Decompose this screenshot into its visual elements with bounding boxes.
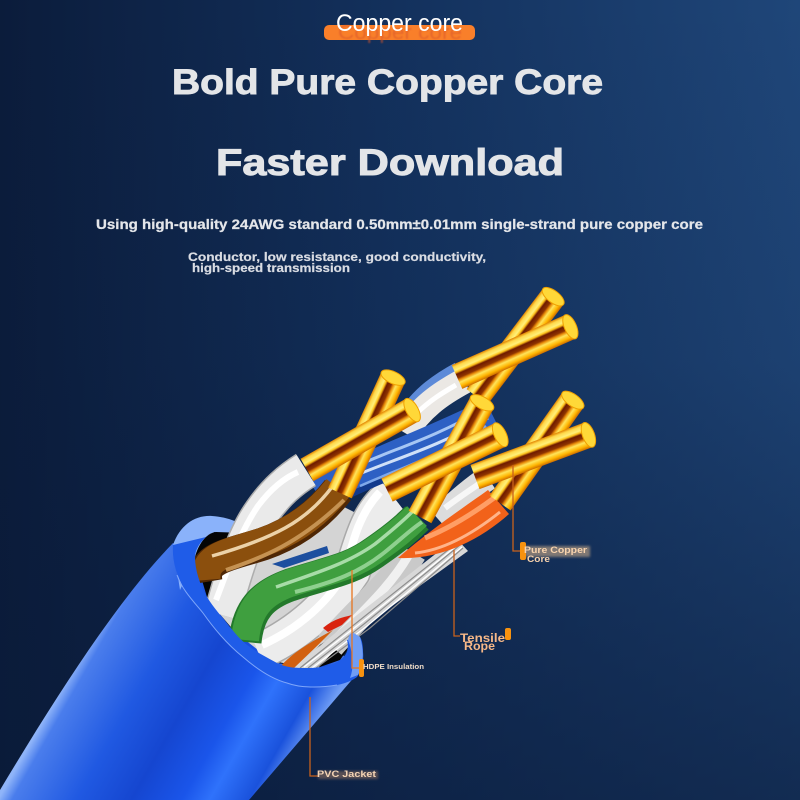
copper conductors: top and right pairs: [452, 284, 599, 511]
white wire: rear: [405, 376, 488, 519]
green wire: [245, 512, 422, 642]
callout: Tensile Rope: [454, 550, 511, 653]
cable illustration: [0, 284, 599, 800]
callout: HDPE Insulation: [352, 570, 424, 677]
copper conductors: center pair: [381, 391, 511, 523]
white wire mass: [208, 505, 410, 666]
callout: PVC Jacket: PVC Jacket: [317, 769, 377, 780]
callout: Tensile Rope: Tensile: [460, 633, 505, 645]
badge: Copper core: [324, 10, 475, 44]
jacket back ring: [173, 516, 254, 590]
badge: Copper core: Copper core: [338, 22, 462, 44]
callout: PVC Jacket: [310, 697, 378, 780]
description block: [188, 250, 486, 275]
subtitle heading: Faster Download: [216, 142, 564, 183]
jacket front lip: [173, 537, 363, 687]
title: Bold Pure Copper Core: [172, 63, 603, 102]
description block: high-speed transmission: [192, 261, 350, 275]
callout: Pure Copper Core: Core: [527, 554, 550, 564]
orange wire: [398, 490, 509, 558]
callout: Pure Copper Core: [513, 465, 590, 564]
description line: Using high-quality 24AWG standard 0.50mm±0.01mm single-strand pure copper core: [96, 217, 704, 232]
rear blue strip: [272, 546, 329, 568]
cable hollow: [195, 532, 348, 668]
callout: Tensile Rope: Rope: [464, 641, 495, 653]
description block: Conductor, low resistance, good conductivity,: [188, 250, 486, 264]
blue wire: [318, 410, 492, 495]
jacket body: [0, 543, 362, 800]
red and orange strands: [280, 615, 352, 668]
callout: Pure Copper Core: Pure Copper: [524, 545, 588, 555]
badge: Copper core: Copper core: [336, 10, 463, 37]
brown wire: [206, 487, 344, 582]
white wire: lower bundle: [258, 492, 412, 652]
copper conductors: left pair: [301, 367, 424, 498]
tensile rope: [293, 538, 468, 668]
callout: HDPE Insulation: HDPE Insulation: [363, 662, 424, 671]
white wire: brown partner: [216, 470, 306, 615]
